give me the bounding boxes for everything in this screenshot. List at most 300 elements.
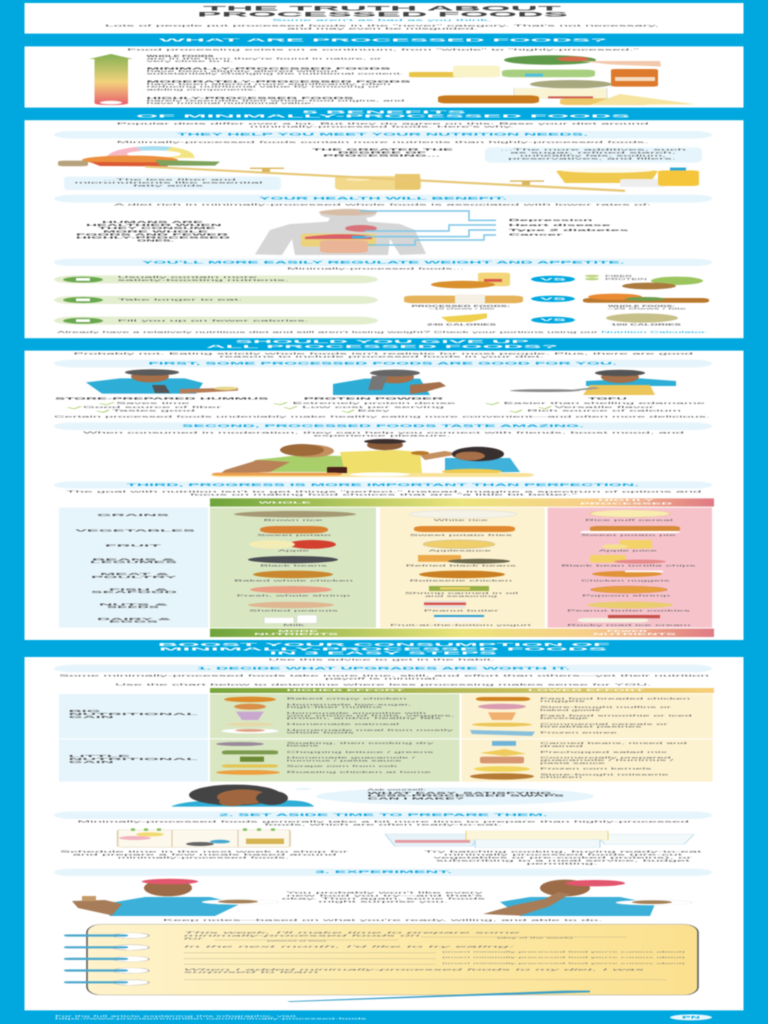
higher effort icons bbox=[216, 697, 280, 775]
lower effort list: Prechopped salad mix bbox=[540, 751, 667, 753]
scale center text: THE GREATER THE bbox=[312, 148, 453, 151]
subheading pill: third bbox=[54, 481, 712, 489]
step 2 right text bbox=[424, 850, 702, 866]
step 2 left text bbox=[60, 850, 349, 860]
whole foods text bbox=[146, 54, 382, 63]
scale center text: PROCESSING... bbox=[323, 154, 440, 157]
whole foods text: are in the form they're found in nature, or bbox=[146, 57, 382, 60]
subheading pill: step 3 bbox=[54, 869, 712, 876]
comparison: row 2 bbox=[404, 294, 709, 310]
panel: should you give up bbox=[24, 351, 744, 640]
footer text: For the full article explaining this infographic, visit bbox=[55, 1015, 297, 1017]
icon: weekly calendar bbox=[118, 828, 290, 847]
benefit row: satiety bbox=[54, 275, 378, 283]
comparison: row 1 bbox=[431, 273, 703, 289]
somewhat processed column: Fruit-at-the-bottom yogurt bbox=[390, 624, 532, 627]
lower effort list: guacamole / hummus / bbox=[540, 759, 674, 762]
notebook prompts: When I added minimally-processed foods to my diet, I was bbox=[184, 968, 644, 971]
food option: protein powder: PROTEIN POWDER bbox=[304, 397, 443, 400]
comparison: row 3 bbox=[427, 313, 681, 326]
higher effort list: Homemade guacamole / bbox=[286, 756, 416, 759]
highly processed column: Peanut butter cookies bbox=[567, 609, 690, 612]
comparison: row 2: PROCESSED FOODS: bbox=[412, 305, 510, 307]
benefit row: longer to eat bbox=[54, 296, 378, 304]
scale center text bbox=[312, 148, 453, 157]
step 3 text: You probably won't like every bbox=[286, 891, 484, 894]
callout: additives: preservatives, and fillers. bbox=[508, 157, 676, 160]
higher effort list: hummus / pasta sauce bbox=[286, 759, 402, 762]
big nutritional gain label: NUTRITIONAL bbox=[69, 713, 199, 716]
comparison: row 2: WHOLE FOODS: bbox=[608, 305, 675, 307]
thought bubble: WHAT EASY, SATISFYING, bbox=[367, 791, 556, 795]
higher effort list: Homemade meal from mostly bbox=[286, 729, 453, 731]
food option: protein powder: Easy bbox=[358, 409, 391, 413]
subheading pill: health: YOUR HEALTH WILL BENEFIT. bbox=[259, 196, 507, 200]
thought bubble: CAN I MAKE? bbox=[367, 797, 464, 800]
illustration: thinking woman bbox=[172, 785, 314, 807]
subheading pill: first bbox=[54, 360, 712, 367]
intro text: Lots of people put processed foods in the "never" category. That's not necessary, bbox=[105, 24, 659, 28]
table footer bar: MORE bbox=[278, 630, 318, 633]
illustration: woman cooking tofu bbox=[510, 370, 676, 395]
disease list bbox=[508, 219, 628, 236]
food option: protein powder: Extremely protein dense bbox=[292, 402, 456, 405]
highly processed column: Apple juice bbox=[599, 549, 657, 552]
lower effort list: Canned beans, rinsed and bbox=[540, 742, 687, 745]
callout: additives: as sugar, refined starch, bbox=[510, 151, 676, 154]
highly processed column: Rocky road ice cream bbox=[567, 624, 691, 627]
somewhat processed column: Peanut butter bbox=[424, 609, 499, 612]
somewhat processed column: Applesauce bbox=[429, 549, 491, 552]
icon: plate and whole foods bbox=[58, 146, 220, 166]
benefit row: fewer calories: Fill you up on fewer calories. bbox=[118, 319, 309, 322]
illustration: woman eating hummus bbox=[86, 369, 238, 394]
table row labels bbox=[75, 514, 195, 623]
progress text bbox=[66, 490, 702, 496]
give up intro bbox=[74, 352, 693, 358]
big nutritional gain label bbox=[69, 710, 199, 719]
subheading pill: step 3: 3. EXPERIMENT. bbox=[315, 870, 452, 874]
higher effort list: Baked crispy chicken bbox=[286, 697, 407, 700]
big nutritional gain label: BIG bbox=[69, 710, 101, 713]
step 2 right text: permitting. bbox=[526, 862, 598, 866]
little nutritional gain label: GAIN bbox=[69, 761, 114, 764]
subheading pill: step 2: 2. SET ASIDE TIME TO PREPARE THEM. bbox=[219, 813, 548, 817]
taste text bbox=[83, 431, 684, 437]
highly processed text: barely resemble their whole-food origins, and bbox=[146, 99, 404, 102]
icon: pen bbox=[287, 991, 590, 1002]
heading: 5 benefits bbox=[136, 109, 630, 118]
higher effort list: protein, and/or healthy fats bbox=[286, 717, 441, 720]
whole foods text: WHOLE FOODS bbox=[146, 54, 213, 58]
whole food column: Sweet potato bbox=[257, 534, 331, 537]
food option: hummus: Good source of fiber bbox=[83, 406, 222, 409]
minimally processed text: have been slightly altered without bbox=[146, 70, 338, 73]
continuum intro: Food processing exists on a continuum, from "whole" to "highly-processed." bbox=[127, 48, 640, 52]
lower effort list: Fast food smoothie or iced bbox=[540, 714, 692, 717]
heading: boost consumption bbox=[158, 642, 610, 656]
title bbox=[197, 5, 568, 18]
comparison: row 1: PROTEIN bbox=[605, 278, 647, 280]
comparison: row 3: 100 CALORIES bbox=[611, 323, 681, 326]
highly processed column: Chicken nuggets bbox=[581, 579, 670, 582]
lower effort list: Commercially prepared bbox=[540, 756, 671, 759]
portions note: Nutrition Calculator. bbox=[601, 331, 708, 334]
logo: PN bbox=[670, 1014, 712, 1020]
comparison: row 3: VS bbox=[540, 318, 567, 322]
humans statement: HIGHLY-PROCESSED bbox=[76, 236, 230, 239]
effort chart backgrounds bbox=[59, 694, 713, 782]
table row labels: DAIRY & bbox=[97, 617, 171, 621]
callout: additives: unhealthy fats, sodium, bbox=[520, 154, 666, 157]
heading: give up: SHOULD YOU GIVE UP bbox=[235, 339, 529, 344]
step 2 text bbox=[77, 820, 689, 826]
lower effort list: Store-bought rotisserie bbox=[540, 773, 669, 776]
higher effort list: Roasting chicken at home bbox=[286, 771, 431, 773]
lower effort icons bbox=[470, 697, 535, 780]
higher effort list: Homemade oatmeal bbox=[286, 723, 399, 725]
spectrum table bbox=[59, 498, 714, 637]
whole foods text: very close to it. bbox=[146, 60, 233, 63]
higher effort list: whole foods bbox=[285, 731, 354, 734]
food option: protein powder: Low cost per serving bbox=[302, 406, 444, 409]
table header bar: HIGHLY bbox=[598, 499, 654, 502]
effort header bbox=[210, 688, 714, 693]
benefit row: satiety: satiety-boosting nutrients. bbox=[118, 279, 289, 282]
lower effort list: Fast food breaded chicken bbox=[540, 697, 690, 700]
give up intro: Probably not. Eating strictly whole foods isn't realistic for most people. Plus, there are good bbox=[74, 352, 693, 355]
somewhat processed column: and seasoning bbox=[425, 595, 497, 597]
step 1 text: Some minimally-processed foods take more time, skill, and effort than others—yet their nutrition bbox=[59, 674, 709, 677]
notebook prompts: This week, I'll make time to prepare some bbox=[184, 931, 520, 935]
somewhat processed column: Rotisserie chicken bbox=[410, 579, 512, 582]
notebook prompts: In the next month, I'd like to try eating: bbox=[184, 945, 515, 949]
lower effort list: Frozen entree bbox=[540, 731, 617, 734]
table row labels: SEEDS bbox=[107, 606, 159, 609]
table row labels: FISH & bbox=[109, 588, 168, 591]
health text: A diet rich in minimally-processed whole foods is associated with lower rates of: bbox=[114, 203, 651, 207]
lower effort list bbox=[540, 697, 692, 779]
step 2 left text: and prepare a few meals based around bbox=[72, 853, 337, 857]
food option: tofu: Easier than shelling edamame bbox=[504, 402, 706, 405]
callout: less fiber: micronutrients like essential bbox=[74, 181, 263, 185]
footer text: https://www.precisionnutrition.com/minimally-processed-foods bbox=[55, 1017, 367, 1020]
footer text bbox=[55, 1015, 367, 1020]
higher effort list: beans bbox=[286, 744, 319, 747]
scale center text: DEGREE OF bbox=[338, 151, 427, 154]
title: THE TRUTH ABOUT bbox=[203, 5, 561, 12]
table row labels: POULTRY bbox=[91, 575, 178, 579]
step 1 text: Use the chart below to determine where less processing makes sense for YOU. bbox=[115, 683, 652, 687]
lower effort list: drained bbox=[540, 745, 583, 747]
heading: what are processed foods: WHAT ARE PROCESSED FOODS? bbox=[159, 37, 607, 43]
subheading pill: weight and appetite bbox=[54, 259, 712, 266]
moderately processed text: reducing nutritional value by removing or bbox=[146, 85, 380, 89]
heading: boost consumption: BOOST YOUR CONSUMPTION OF bbox=[158, 642, 610, 647]
higher effort list: Chopping lettuce / greens bbox=[286, 751, 434, 753]
step 3 text bbox=[282, 891, 485, 903]
table header bar: PROCESSED bbox=[580, 502, 672, 506]
somewhat processed column: White rice bbox=[434, 519, 488, 522]
step 2 right text: subscribing to a meal service, budget bbox=[436, 859, 690, 863]
humans statement: ONES. bbox=[137, 239, 174, 242]
table row labels: SEAFOOD bbox=[91, 591, 177, 594]
higher effort list: Scrape corn from cob bbox=[286, 765, 397, 767]
table row labels: EGGS bbox=[109, 620, 158, 623]
step 2 left text: minimally-processed foods. bbox=[118, 856, 289, 860]
moderately processed text: adding components. bbox=[146, 88, 256, 91]
whole food column bbox=[234, 511, 356, 627]
highly processed text: HIGHLY-PROCESSED FOODS bbox=[146, 96, 354, 100]
subtitle: Some aren't as bad as you think. bbox=[272, 19, 492, 22]
step 2 right text: vegetables or pre-cooked proteins), or bbox=[434, 856, 693, 860]
higher effort list bbox=[285, 697, 454, 773]
taste text: When consumed in moderation, they can help you connect with friends, boost mood, and bbox=[83, 431, 684, 434]
whole food column: Baked whole chicken bbox=[234, 579, 353, 582]
highly processed column: Sweet potato pie bbox=[581, 534, 676, 537]
step 3 text: might surprise you. bbox=[318, 900, 448, 903]
step 1 text bbox=[59, 674, 709, 687]
table footer bar: FEWER bbox=[607, 630, 648, 633]
illustration: woman with protein powder bbox=[333, 370, 446, 395]
title: PROCESSED FOODS bbox=[197, 11, 568, 18]
steps intro: Use this advice to get in the habit. bbox=[268, 658, 495, 662]
food option: tofu bbox=[486, 397, 706, 413]
table header bar: WHOLE bbox=[259, 501, 311, 504]
thought bubble: Ask yourself: bbox=[367, 788, 426, 792]
highly processed column: Black bean tortilla chips bbox=[561, 564, 696, 567]
effort header: LOWER EFFORT bbox=[528, 689, 645, 692]
disease list: Type 2 diabetes bbox=[508, 228, 628, 232]
subheading pill: first: FIRST, SOME PROCESSED FOODS ARE GOOD FOR YOU. bbox=[148, 361, 617, 365]
benefits intro: minimally-processed foods. Here's why. bbox=[250, 125, 514, 128]
connector lines bbox=[360, 211, 496, 245]
subheading pill: nutrition needs: THEY HELP YOU MEET YOUR NUTRITION NEEDS. bbox=[177, 133, 588, 137]
thought bubble bbox=[295, 788, 594, 805]
icon: food storage containers bbox=[385, 831, 694, 848]
nutrition text: Minimally-processed foods contain more nutrients than highly-processed foods. bbox=[117, 141, 649, 144]
illustration: man tasting food left bbox=[72, 879, 278, 916]
comparison: row 2: VS bbox=[540, 297, 567, 301]
keep notes text: Keep notes—based on what you're ready, willing, and able to do. bbox=[163, 919, 602, 922]
table row labels: MEAT & bbox=[100, 573, 169, 576]
step 2 right text: minimally processed foods (pre-cut bbox=[444, 853, 682, 857]
moderately processed text: have been altered more significantly, often bbox=[146, 83, 391, 86]
food option: tofu: Versatile flavor bbox=[554, 406, 655, 409]
food option: hummus: STORE-PREPARED HUMMUS bbox=[55, 397, 268, 400]
benefits intro: Popular diets differ over a lot. But they do agree on this: Base your diet around bbox=[117, 122, 649, 125]
humans statement: MORE WHOLE bbox=[103, 230, 208, 233]
panel: benefits bbox=[24, 120, 744, 338]
higher effort list: your choice of fruits, veggies, bbox=[286, 714, 454, 717]
notebook prompts: (day of the week) bbox=[497, 937, 573, 939]
table column backgrounds bbox=[59, 508, 712, 628]
callout: additives bbox=[485, 147, 702, 163]
callout: additives: ...The more additives, such bbox=[500, 148, 686, 151]
lower effort list: pasta sauce bbox=[540, 762, 605, 764]
food option: hummus: Tastes good bbox=[112, 409, 195, 413]
food option: tofu: Rich source of calcium bbox=[527, 409, 681, 413]
subheading pill: step 2 bbox=[54, 811, 712, 819]
minimally processed text: MINIMALLY-PROCESSED FOODS bbox=[146, 67, 391, 70]
subheading pill: weight and appetite: YOU'LL MORE EASILY REGULATE WEIGHT AND APPETITE. bbox=[142, 260, 625, 264]
callout: less fiber: ...The less fiber and bbox=[103, 178, 236, 182]
table row labels: LEGUMES bbox=[90, 561, 177, 564]
heading: give up: ALL PROCESSED FOODS? bbox=[206, 344, 558, 349]
callout: less fiber bbox=[64, 177, 281, 190]
step 2 left text: Schedule time in the next week to shop for bbox=[60, 850, 349, 854]
whole food column: Brown rice bbox=[264, 519, 322, 522]
comparison: row 1: FIBER bbox=[605, 275, 632, 277]
table row labels: BEANS & bbox=[92, 558, 175, 561]
benefits intro bbox=[117, 122, 649, 128]
disease list: Cancer bbox=[508, 233, 564, 236]
little nutritional gain label bbox=[69, 755, 199, 764]
notebook prompts: (insert minimally-processed food you're curious about) bbox=[442, 962, 685, 965]
comparison: row 3: 240 CALORIES bbox=[427, 323, 496, 326]
food option: tofu: TOFU bbox=[588, 397, 627, 400]
higher effort list: Soaking, then cooking dry bbox=[286, 742, 434, 745]
notebook prompts: (insert minimally-processed food you're curious about) bbox=[442, 951, 685, 953]
highly processed text bbox=[146, 96, 404, 105]
lower effort list: baked goods bbox=[540, 709, 600, 711]
portions note: Already have a relatively nutritious diet and still aren't losing weight? Check your portions using our bbox=[57, 331, 599, 334]
whole food column: Black beans bbox=[260, 564, 327, 567]
whole food column: Shelled peanuts bbox=[249, 609, 338, 612]
highly processed column: Popcorn shrimp bbox=[582, 594, 670, 597]
humans statement bbox=[76, 221, 230, 242]
higher effort list: high-fiber muffins bbox=[286, 706, 382, 709]
humans statement: FOODS AND FEWER bbox=[76, 233, 228, 236]
subheading pill: step 1 bbox=[54, 665, 712, 672]
food option: hummus: Saves time bbox=[116, 402, 190, 405]
notebook prompts: for bbox=[184, 937, 204, 940]
table footer bar bbox=[210, 629, 714, 637]
food illustration bbox=[409, 55, 696, 105]
convenience statement: Certain processed foods undeniably make healthy eating more convenient—and often more delicious. bbox=[54, 415, 710, 419]
higher effort list: Homemade smoothie with bbox=[286, 712, 426, 714]
step 2 text: Minimally-processed foods generally take a bit more time to prepare than highly-processed bbox=[77, 820, 689, 823]
panel: title bbox=[24, 3, 744, 34]
lower effort list: beverage bbox=[540, 717, 588, 720]
lower effort list: breakfast pastries bbox=[540, 725, 642, 728]
whole food column: Milk bbox=[283, 624, 304, 627]
table row labels: NUTS & bbox=[99, 603, 168, 606]
minimally processed text bbox=[146, 67, 404, 76]
little nutritional gain label: NUTRITIONAL bbox=[69, 758, 199, 761]
table header bar bbox=[210, 498, 714, 507]
big nutritional gain label: GAIN bbox=[69, 716, 114, 719]
benefit row: fewer calories bbox=[54, 317, 378, 325]
food option: hummus bbox=[55, 397, 268, 413]
progress text: The goal with nutrition isn't to get things "perfect." Instead, imagine a spectrum of options and bbox=[66, 490, 702, 493]
somewhat processed column: Sweet potato fries bbox=[410, 534, 512, 537]
humans statement: HEALTHIER WHEN bbox=[86, 224, 222, 227]
highly processed column: Rice puff cereal bbox=[585, 519, 673, 522]
somewhat processed column bbox=[390, 510, 532, 627]
notebook prompts: surprised to learn bbox=[184, 971, 319, 974]
benefit row: longer to eat: Take longer to eat. bbox=[118, 298, 243, 302]
heading: boost consumption: MINIMALLY-PROCESSED FOODS bbox=[159, 646, 607, 652]
notebook bbox=[64, 924, 698, 995]
minimally processed text: substantially changing the nutritional content. bbox=[146, 72, 404, 76]
step 2 right text: Try batching cooking, buying ready-to-eat bbox=[424, 850, 702, 854]
heading: give up bbox=[206, 339, 558, 349]
notebook rings bbox=[64, 933, 149, 985]
higher effort list: Homemade low-sugar, bbox=[286, 703, 411, 706]
icon: processed ingredients bbox=[556, 167, 699, 187]
panel: steps bbox=[24, 657, 744, 1010]
subheading pill: second bbox=[54, 422, 712, 430]
lower effort list: Store-bought muffins or bbox=[540, 706, 671, 709]
table row labels: VEGETABLES bbox=[75, 529, 195, 532]
humans statement: HUMANS ARE bbox=[102, 221, 203, 224]
lower effort list: nuggets bbox=[540, 700, 585, 703]
appetite text: Minimally-processed foods... bbox=[287, 267, 464, 270]
step 3 text: new food you try—and that's bbox=[286, 894, 483, 897]
progress text: focus on making food choices that are "a little bit better." bbox=[190, 493, 578, 496]
somewhat processed column: Shrimp canned in oil bbox=[405, 592, 518, 595]
step 3 text: okay. Then again, some foods bbox=[282, 897, 485, 900]
somewhat processed column: Refried black beans bbox=[406, 564, 516, 567]
intro text: and may even be misguided. bbox=[287, 27, 478, 31]
illustration: friends eating together bbox=[211, 439, 534, 477]
notebook prompts bbox=[184, 931, 685, 980]
moderately processed text: MODERATELY-PROCESSED FOODS bbox=[146, 80, 410, 83]
comparison: row 1: VS bbox=[540, 277, 567, 281]
callout: less fiber: fatty acids bbox=[133, 184, 203, 188]
step 1 text: payoff is minimal. bbox=[325, 677, 439, 680]
continuum arrow bbox=[89, 54, 133, 105]
lower effort list: Frozen corn kernels bbox=[540, 767, 652, 770]
comparison: row 2: ~25 chews / bite bbox=[607, 307, 686, 310]
disease list: Heart disease bbox=[508, 223, 611, 227]
benefit row: satiety: Usually contain more bbox=[118, 276, 258, 279]
icon: tilted scale bbox=[145, 166, 625, 192]
heading: 5 benefits: 5 BENEFITS bbox=[302, 109, 466, 114]
highly processed column bbox=[561, 510, 696, 627]
notebook prompts: (amount of time) bbox=[267, 940, 326, 942]
taste text: experience pleasure. bbox=[314, 434, 451, 437]
table footer bar: NUTRIENTS bbox=[593, 633, 676, 636]
heading: 5 benefits: OF MINIMALLY-PROCESSED FOODS bbox=[136, 113, 630, 118]
subheading pill: health bbox=[54, 195, 712, 203]
body diagram bbox=[255, 209, 426, 255]
heading: boost consumption: IN 3 EASY STEPS bbox=[269, 650, 497, 656]
table row labels: GRAINS bbox=[97, 514, 169, 517]
moderately processed text bbox=[146, 80, 410, 91]
table row labels: FRUIT bbox=[105, 544, 162, 547]
comparison: row 2: ~10 chews / bite bbox=[429, 307, 495, 310]
highly processed text: have minimal nutritional value. bbox=[146, 102, 314, 105]
subheading pill: step 1: 1. DECIDE WHAT UPGRADES ARE WORTH IT. bbox=[197, 666, 570, 670]
intro text bbox=[105, 24, 659, 31]
humans statement: THEY CONSUME bbox=[98, 227, 215, 230]
lower effort list: Commercial cereals or bbox=[540, 723, 668, 725]
effort header: HIGHER EFFORT bbox=[286, 689, 405, 692]
subheading pill: nutrition needs bbox=[54, 131, 712, 139]
subheading pill: second: SECOND, PROCESSED FOODS TASTE AMAZING. bbox=[182, 424, 584, 428]
give up intro: reasons to include processed foods in your diet. bbox=[220, 355, 544, 358]
whole food column: Fresh, whole shrimp bbox=[237, 594, 350, 597]
panel: what are processed foods bbox=[24, 46, 744, 108]
little nutritional gain label: LITTLE bbox=[69, 755, 130, 758]
lower effort list: chicken bbox=[540, 776, 582, 779]
logo: PN: PN bbox=[682, 1015, 700, 1019]
effort chart bbox=[59, 688, 714, 782]
notebook prompts: (insert minimally-processed food you're curious about) bbox=[442, 956, 685, 959]
table footer bar: NUTRIENTS bbox=[254, 633, 338, 636]
